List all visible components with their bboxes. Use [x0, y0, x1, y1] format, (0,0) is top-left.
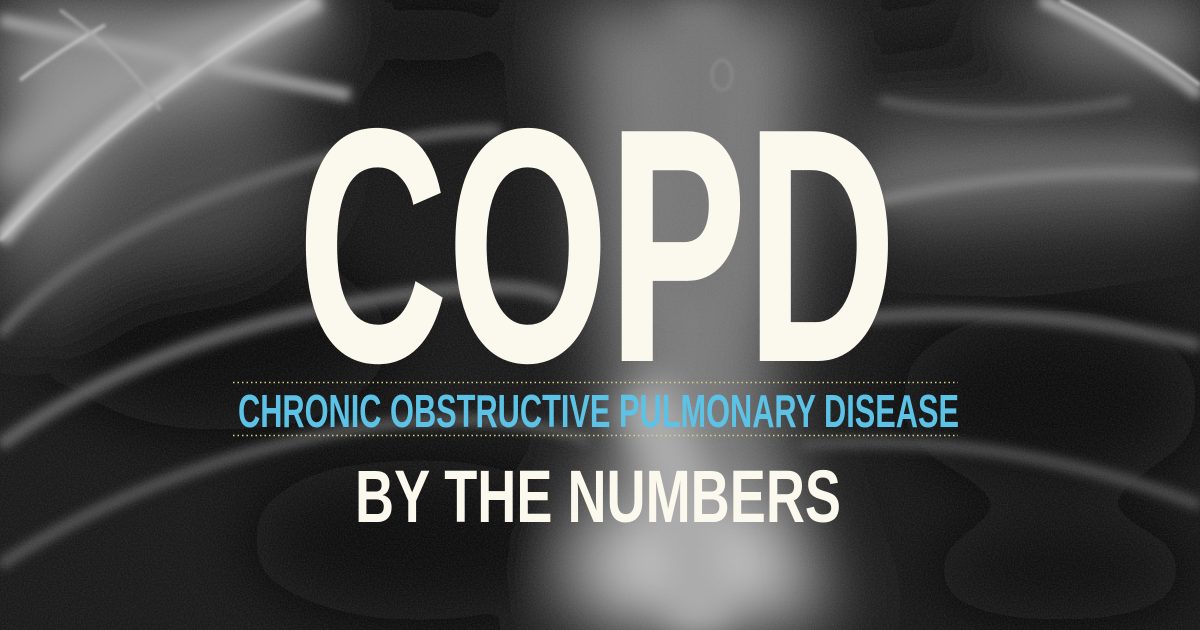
heading: by the numbers: BY THE NUMBERS — [355, 455, 841, 538]
